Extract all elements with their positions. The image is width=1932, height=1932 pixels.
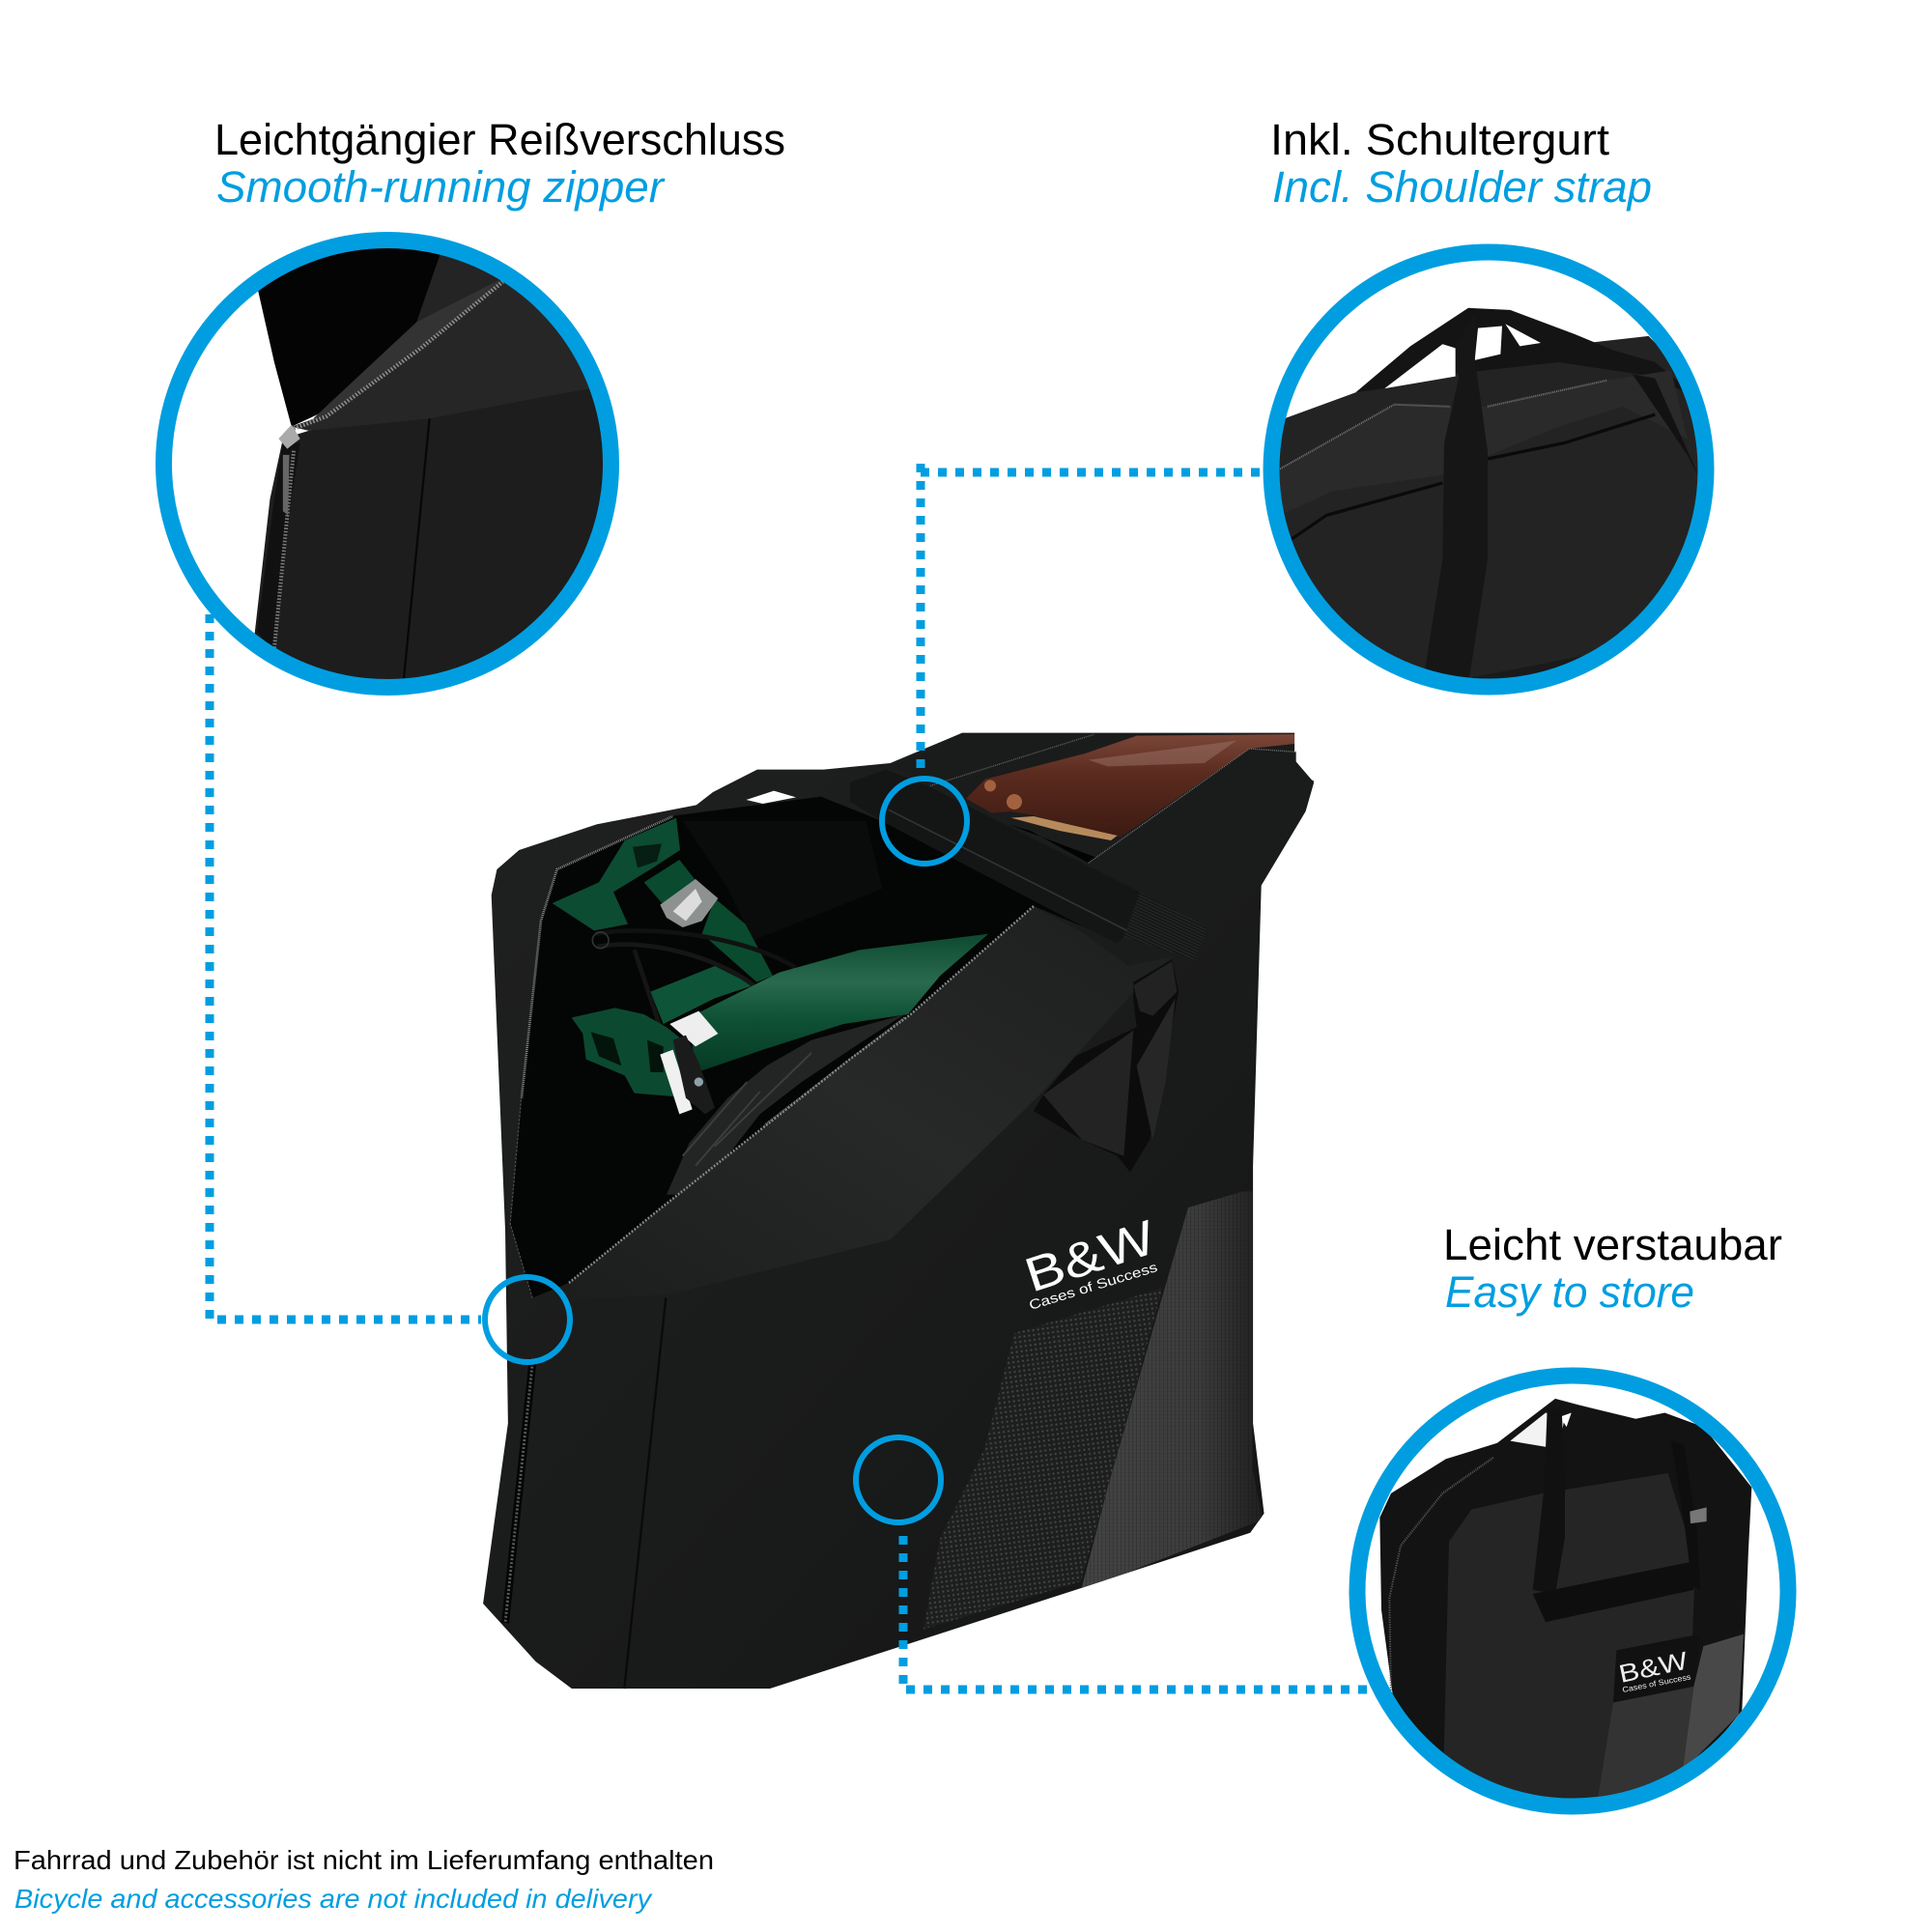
heading: zipper: Smooth-running zipper xyxy=(216,162,666,212)
bag interior xyxy=(511,797,1085,1297)
dotted connector: shoulder strap detail to main bag xyxy=(921,464,1267,779)
ring xyxy=(1357,1376,1788,1806)
detail circle: zipper xyxy=(164,240,628,700)
detail circle: shoulder strap xyxy=(1263,252,1719,700)
folded bicycle frame xyxy=(522,816,988,1195)
locator circle: strap xyxy=(882,779,967,864)
heading: easy to store: Leicht verstaubar xyxy=(1443,1220,1782,1269)
main bag logo: B&W xyxy=(1018,1209,1163,1302)
heading: zipper: Leichtgängier Reißverschluss xyxy=(214,115,785,164)
saddle, strap and handle xyxy=(850,733,1314,1172)
ring xyxy=(164,240,611,688)
footer disclaimer: Fahrrad und Zubehör ist nicht im Lieferumfang enthalten xyxy=(14,1845,714,1875)
main bag logo: Cases of Success xyxy=(1027,1259,1159,1313)
dotted connector: zipper detail to main bag xyxy=(210,614,481,1320)
dotted connector: storage detail to main bag xyxy=(903,1536,1377,1690)
small bag logo xyxy=(1616,1645,1691,1694)
main bag photo illustration xyxy=(483,733,1314,1689)
bag body xyxy=(483,733,1314,1689)
heading: zipper xyxy=(214,115,785,212)
small bag logo: B&W xyxy=(1616,1645,1690,1689)
small bag logo: Cases of Success xyxy=(1622,1672,1691,1694)
locator circle: zipper xyxy=(485,1277,570,1362)
heading: easy to store: Easy to store xyxy=(1445,1267,1694,1317)
heading: easy to store xyxy=(1443,1220,1782,1317)
bag flap xyxy=(557,906,1173,1301)
printed grey graphic panels xyxy=(923,1191,1263,1630)
footer disclaimer: Bicycle and accessories are not included in delivery xyxy=(14,1884,653,1914)
detail circle: easy to store xyxy=(1357,1376,1788,1811)
main bag logo xyxy=(1018,1209,1163,1313)
heading: shoulder strap: Inkl. Schultergurt xyxy=(1270,115,1610,164)
heading: shoulder strap: Incl. Shoulder strap xyxy=(1272,162,1652,212)
locator circle: storage xyxy=(856,1437,941,1522)
ring xyxy=(1271,252,1706,687)
heading: shoulder strap xyxy=(1270,115,1652,212)
footer disclaimer xyxy=(14,1845,714,1914)
